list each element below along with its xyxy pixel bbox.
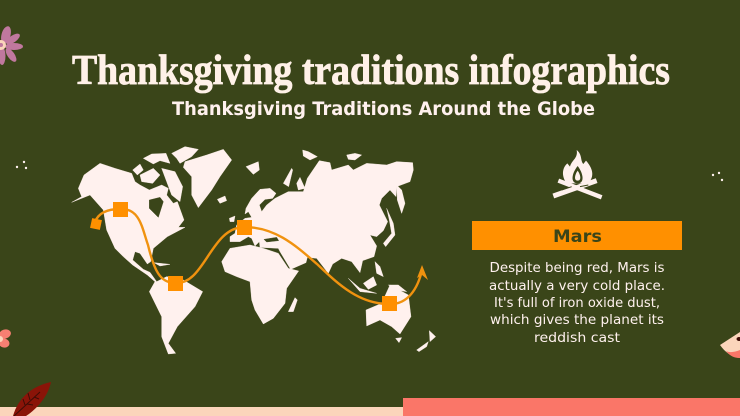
decoration: partial bird at right edge	[720, 332, 740, 358]
bottom band: coral	[403, 398, 740, 416]
subtitle: Thanksgiving Traditions Around the Globe	[172, 98, 595, 120]
bottom band: peach	[0, 407, 404, 416]
description text: actually a very cold place.	[489, 279, 665, 294]
world map	[72, 147, 436, 354]
route arrowhead	[417, 265, 428, 280]
description text: It's full of iron oxide dust,	[494, 296, 660, 311]
decoration: red leaf	[13, 382, 51, 416]
route line	[95, 209, 422, 304]
route marker: North America	[113, 202, 128, 217]
decoration: dots right	[712, 172, 723, 181]
route marker: start	[90, 218, 102, 230]
icon: campfire	[553, 150, 602, 197]
description text: reddish cast	[534, 331, 620, 346]
label bar: Mars	[472, 221, 682, 250]
description text: which gives the planet its	[490, 313, 664, 328]
map: Eurasia, Africa, Australia	[222, 150, 436, 352]
label bar: Mars: Mars	[553, 227, 602, 247]
description text	[489, 261, 665, 346]
route marker: Europe	[237, 220, 252, 235]
route marker: South America	[168, 276, 183, 291]
description text: Despite being red, Mars is	[490, 261, 665, 276]
map: Americas	[72, 147, 232, 354]
title: Thanksgiving traditions infographics	[72, 48, 670, 94]
decoration: pink flower	[0, 25, 23, 65]
decoration: dots left	[16, 161, 27, 169]
decoration: coral flower	[0, 328, 12, 349]
route marker: Australia	[382, 296, 397, 311]
